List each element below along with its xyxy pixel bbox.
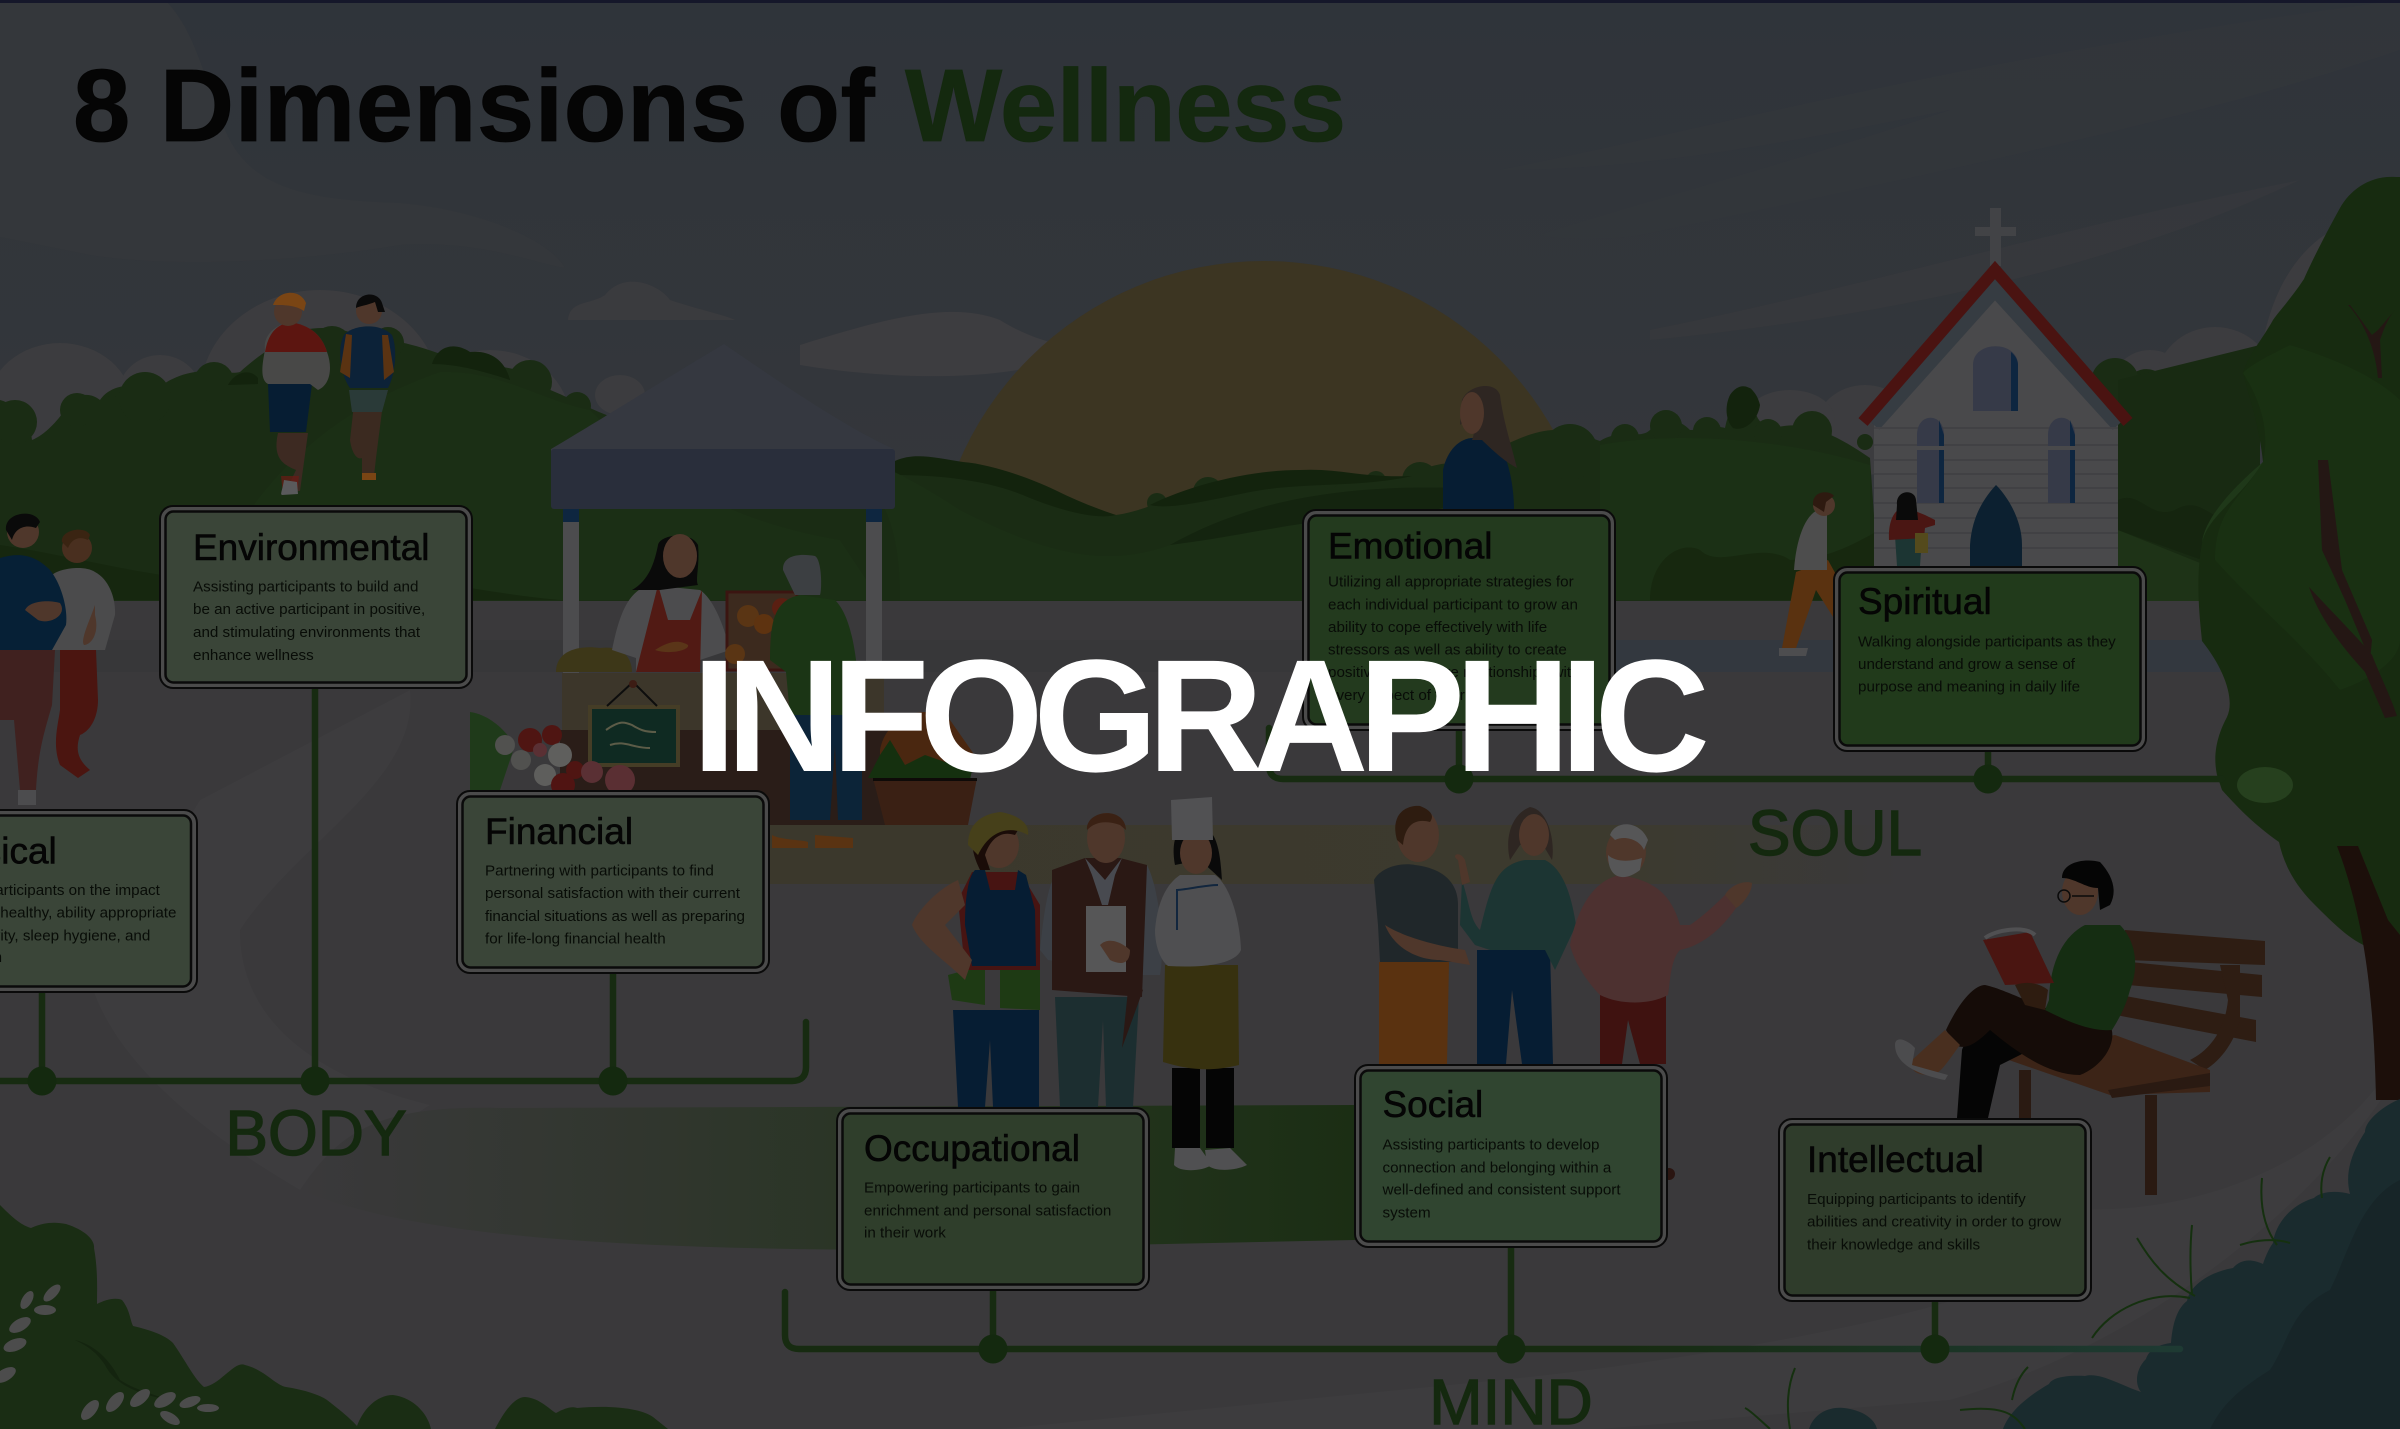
panel: occupational — [837, 1108, 1149, 1290]
text block: Equipping participants to identify — [1807, 1191, 2026, 1208]
text block: stressors as well as ability to create — [1328, 642, 1567, 658]
people: social group — [1374, 806, 1752, 1180]
tree branches — [2309, 587, 2397, 718]
sweater — [2045, 925, 2135, 1030]
text block: connection and belonging within a — [1382, 1160, 1612, 1176]
yellow path band — [770, 825, 1900, 884]
tent roof — [551, 344, 894, 460]
text block: their knowledge and skills — [1807, 1236, 1980, 1254]
body connector — [0, 686, 806, 1096]
church — [1863, 208, 2128, 602]
heading: Intellectual — [1807, 1139, 1984, 1180]
panel: spiritual — [1834, 567, 2146, 751]
tree foliage — [2198, 177, 2400, 960]
worker — [912, 812, 1040, 1107]
people: runners — [0, 514, 115, 805]
counter — [562, 673, 884, 733]
heading: Social — [1382, 1084, 1483, 1125]
clouds — [0, 220, 2360, 500]
chef — [1155, 797, 1247, 1170]
chalkboard sign — [590, 707, 678, 765]
text block: enrichment and personal satisfaction — [864, 1202, 1111, 1220]
roof — [1863, 270, 2128, 422]
distant hills — [0, 326, 2250, 602]
door — [1970, 485, 2022, 570]
soul connector — [1269, 728, 2222, 794]
text block: financial situations as well as preparing — [485, 908, 745, 925]
panel: social — [1355, 1065, 1667, 1247]
panel: environmental — [160, 506, 472, 688]
heading: Occupational — [864, 1128, 1080, 1169]
text block: in their work — [864, 1224, 946, 1242]
heading: Financial — [485, 811, 633, 852]
vendor — [612, 585, 730, 672]
gable fascia — [1874, 290, 2118, 425]
title: Wellness — [905, 48, 1346, 163]
legs — [1957, 1025, 2030, 1118]
flowers — [470, 712, 635, 797]
body label: BODY — [225, 1097, 407, 1169]
panel: emotional — [1303, 510, 1615, 730]
corn basket — [873, 778, 977, 825]
text block: Walking alongside participants as they — [1858, 634, 2116, 650]
head — [2062, 869, 2098, 915]
text block: understand and grow a sense of — [1858, 656, 2076, 673]
cross — [1975, 208, 2016, 266]
text block: personal satisfaction with their current — [485, 885, 741, 902]
foreground hill shading — [0, 345, 2260, 602]
side windows — [1917, 418, 1944, 503]
supervisor — [1040, 813, 1162, 1107]
text block: positive and secure relationships with — [1328, 664, 1580, 681]
text block: and stimulating environments that — [193, 624, 421, 641]
mind connector — [785, 1246, 2180, 1364]
walls — [1874, 300, 2118, 602]
right bush — [1745, 1099, 2400, 1429]
man in dark shirt — [1374, 806, 1470, 1064]
panel: intellectual — [1779, 1119, 2091, 1301]
text block: each individual participant to grow an — [1328, 596, 1578, 614]
produce crate — [727, 592, 797, 670]
panel: physical — [0, 810, 197, 992]
older man — [1570, 824, 1752, 1064]
text block: system — [1382, 1204, 1431, 1222]
text block: be an active participant in positive, — [193, 601, 425, 618]
panel: financial — [457, 791, 769, 973]
soul label: SOUL — [1748, 797, 1922, 869]
text block: enhance wellness — [193, 647, 314, 664]
people: occupational group — [912, 797, 1247, 1170]
bench — [2003, 930, 2265, 1195]
tent valance — [551, 449, 895, 509]
people: hikers — [262, 293, 395, 495]
text block: Partnering with participants to find — [485, 862, 714, 880]
dark tree line — [228, 346, 1760, 516]
text block: Assisting participants to develop — [1382, 1136, 1599, 1154]
tent poles — [563, 509, 882, 680]
market stall — [470, 344, 985, 848]
text block: ability to cope effectively with life — [1328, 619, 1547, 636]
left bush — [0, 1205, 668, 1429]
watermark heading: INFOGRAPHIC — [692, 626, 1706, 805]
text block: purpose and meaning in daily life — [1858, 678, 2080, 696]
green path band — [300, 1105, 1355, 1250]
bench and reader — [1895, 861, 2265, 1195]
book — [1983, 932, 2054, 985]
siding — [1874, 428, 2118, 548]
walking stick — [1663, 1168, 1675, 1180]
sun — [932, 261, 1596, 925]
heading: Environmental — [193, 527, 430, 568]
title: 8 Dimensions of — [73, 48, 876, 163]
top window — [1973, 346, 2018, 411]
ground — [0, 601, 2400, 1429]
people: walkers at church — [1779, 492, 1935, 656]
heading: Emotional — [1328, 526, 1493, 566]
people: emotional woman — [1443, 386, 1517, 510]
text block: Empowering participants to gain — [864, 1180, 1080, 1196]
text block: abilities and creativity in order to grow — [1807, 1214, 2061, 1230]
text block: Assisting participants to build and — [193, 578, 418, 596]
shopper — [790, 715, 862, 820]
text block: for life-long financial health — [485, 930, 666, 948]
heading: Spiritual — [1858, 581, 1992, 622]
text block: Utilizing all appropriate strategies for — [1328, 574, 1574, 590]
woman in teal — [1455, 807, 1576, 1064]
tree trunk — [2337, 846, 2400, 1100]
text block: well-defined and consistent support — [1382, 1182, 1621, 1198]
text block: every aspect of their — [1328, 687, 1465, 704]
fruit pile — [556, 647, 632, 672]
